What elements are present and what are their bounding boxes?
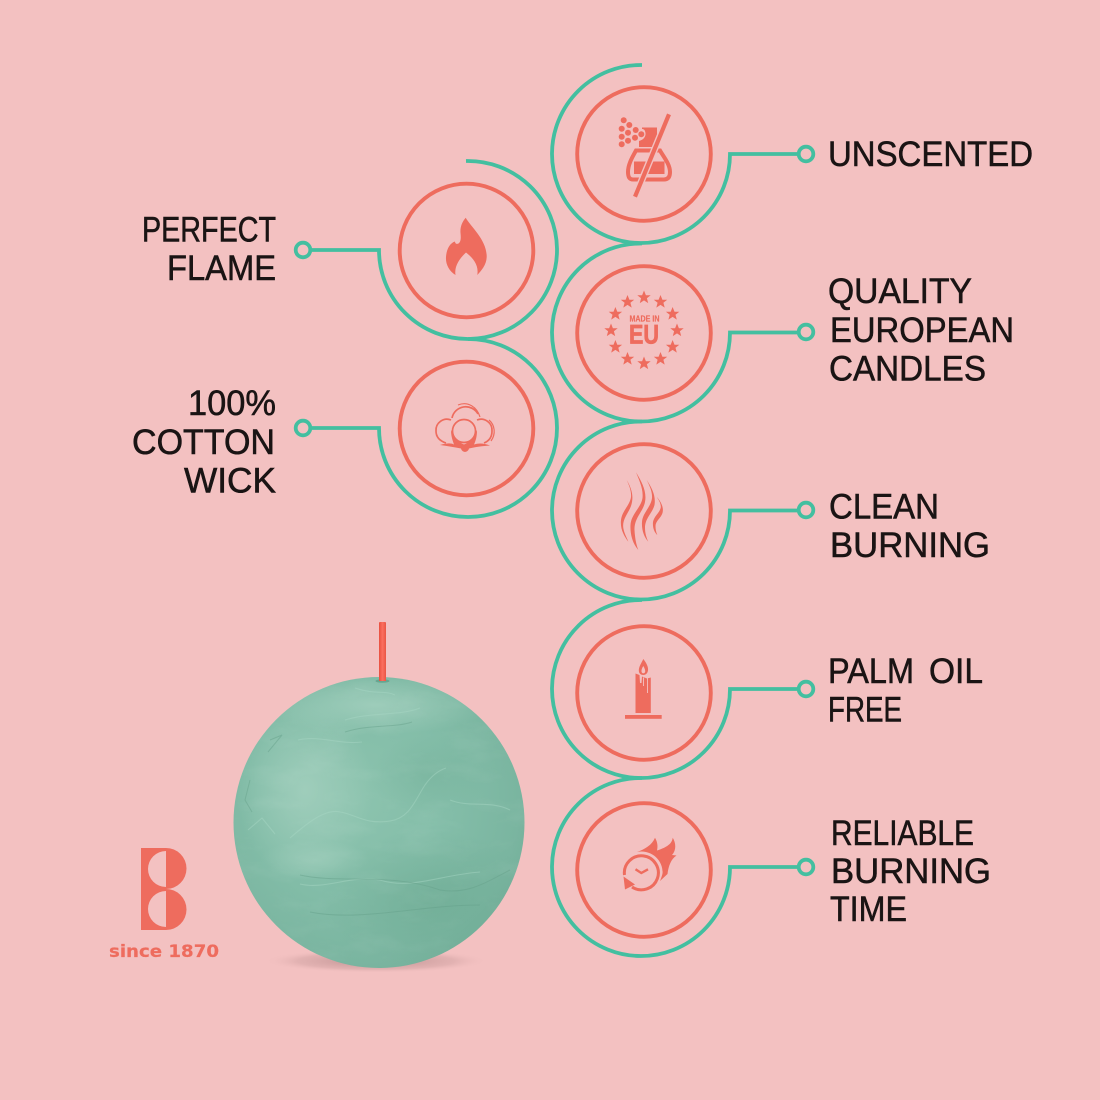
feature: quality european candles [552, 243, 1014, 421]
candle shadow [264, 949, 488, 973]
logo text: since 1870 [109, 942, 219, 962]
icon: candle [625, 659, 662, 719]
label [830, 813, 991, 929]
label: 100% [188, 383, 276, 423]
connector arc [552, 600, 799, 778]
node [799, 503, 813, 517]
node [799, 860, 813, 874]
feature: reliable burning time [552, 778, 991, 956]
icon: flame [446, 218, 487, 275]
icon ring [400, 362, 533, 495]
icon: made in EU stars [604, 290, 684, 369]
label: WICK [184, 460, 276, 500]
label [828, 271, 1014, 388]
label: COTTON [132, 422, 275, 462]
connector arc [310, 339, 557, 517]
node [799, 682, 813, 696]
label: RELIABLE [831, 813, 974, 853]
connector arc [552, 243, 799, 421]
feature: cotton wick [132, 339, 557, 517]
label: OIL [929, 651, 983, 691]
label: BURNING [831, 851, 991, 891]
icon: burning clock [624, 838, 676, 890]
wax sphere [233, 675, 540, 970]
logo mark: B [141, 848, 186, 930]
feature: palm oil free [552, 600, 983, 778]
node [296, 421, 310, 435]
wick [379, 622, 386, 682]
feature: perfect flame [142, 161, 557, 339]
label: BURNING [830, 525, 990, 565]
icon ring [577, 444, 711, 578]
connector arc [552, 65, 799, 243]
icon: made in EU stars: EU [629, 320, 659, 350]
icon ring [400, 184, 533, 317]
label: FLAME [167, 248, 276, 288]
connector arc [310, 161, 557, 339]
label: TIME [830, 889, 907, 929]
label: PERFECT [142, 210, 276, 250]
label [828, 651, 983, 730]
feature: unscented [552, 65, 1033, 243]
node [296, 243, 310, 257]
icon ring [577, 87, 711, 221]
node [799, 325, 813, 339]
label [829, 486, 990, 565]
label [132, 383, 276, 500]
icon: made in EU stars: MADE IN [630, 314, 660, 324]
node [799, 147, 813, 161]
connector arc [552, 421, 799, 599]
label: CANDLES [829, 348, 986, 388]
icon ring [577, 626, 711, 760]
icon: smoke waves [621, 472, 663, 550]
label: EUROPEAN [830, 310, 1014, 350]
icon: crossed-out perfume bottle [619, 114, 670, 197]
icon ring [577, 803, 711, 937]
label: FREE [828, 690, 902, 730]
label: UNSCENTED [828, 134, 1033, 174]
icon: cotton boll [436, 404, 494, 452]
connector arc [552, 778, 799, 956]
label [142, 210, 276, 288]
label: QUALITY [828, 271, 972, 311]
feature: clean burning [552, 421, 990, 599]
logo [109, 848, 219, 962]
label: CLEAN [829, 486, 939, 526]
candle: rustic sphere with red wick [233, 622, 540, 973]
wick base [376, 679, 390, 683]
label: PALM [828, 651, 914, 691]
icon ring [577, 266, 711, 400]
